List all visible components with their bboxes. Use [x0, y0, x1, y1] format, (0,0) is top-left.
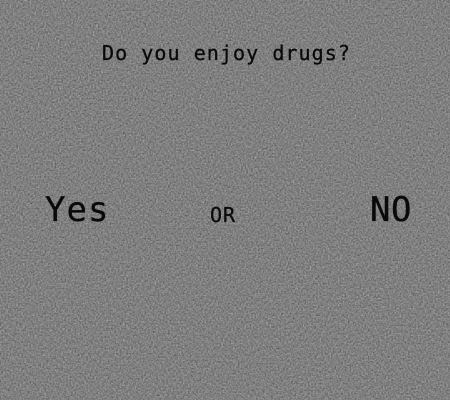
- title: question: Do you enjoy drugs?: [102, 41, 351, 65]
- option: NO: NO: [370, 190, 412, 230]
- label: OR: OR: [210, 203, 236, 227]
- option: Yes: Yes: [45, 190, 109, 230]
